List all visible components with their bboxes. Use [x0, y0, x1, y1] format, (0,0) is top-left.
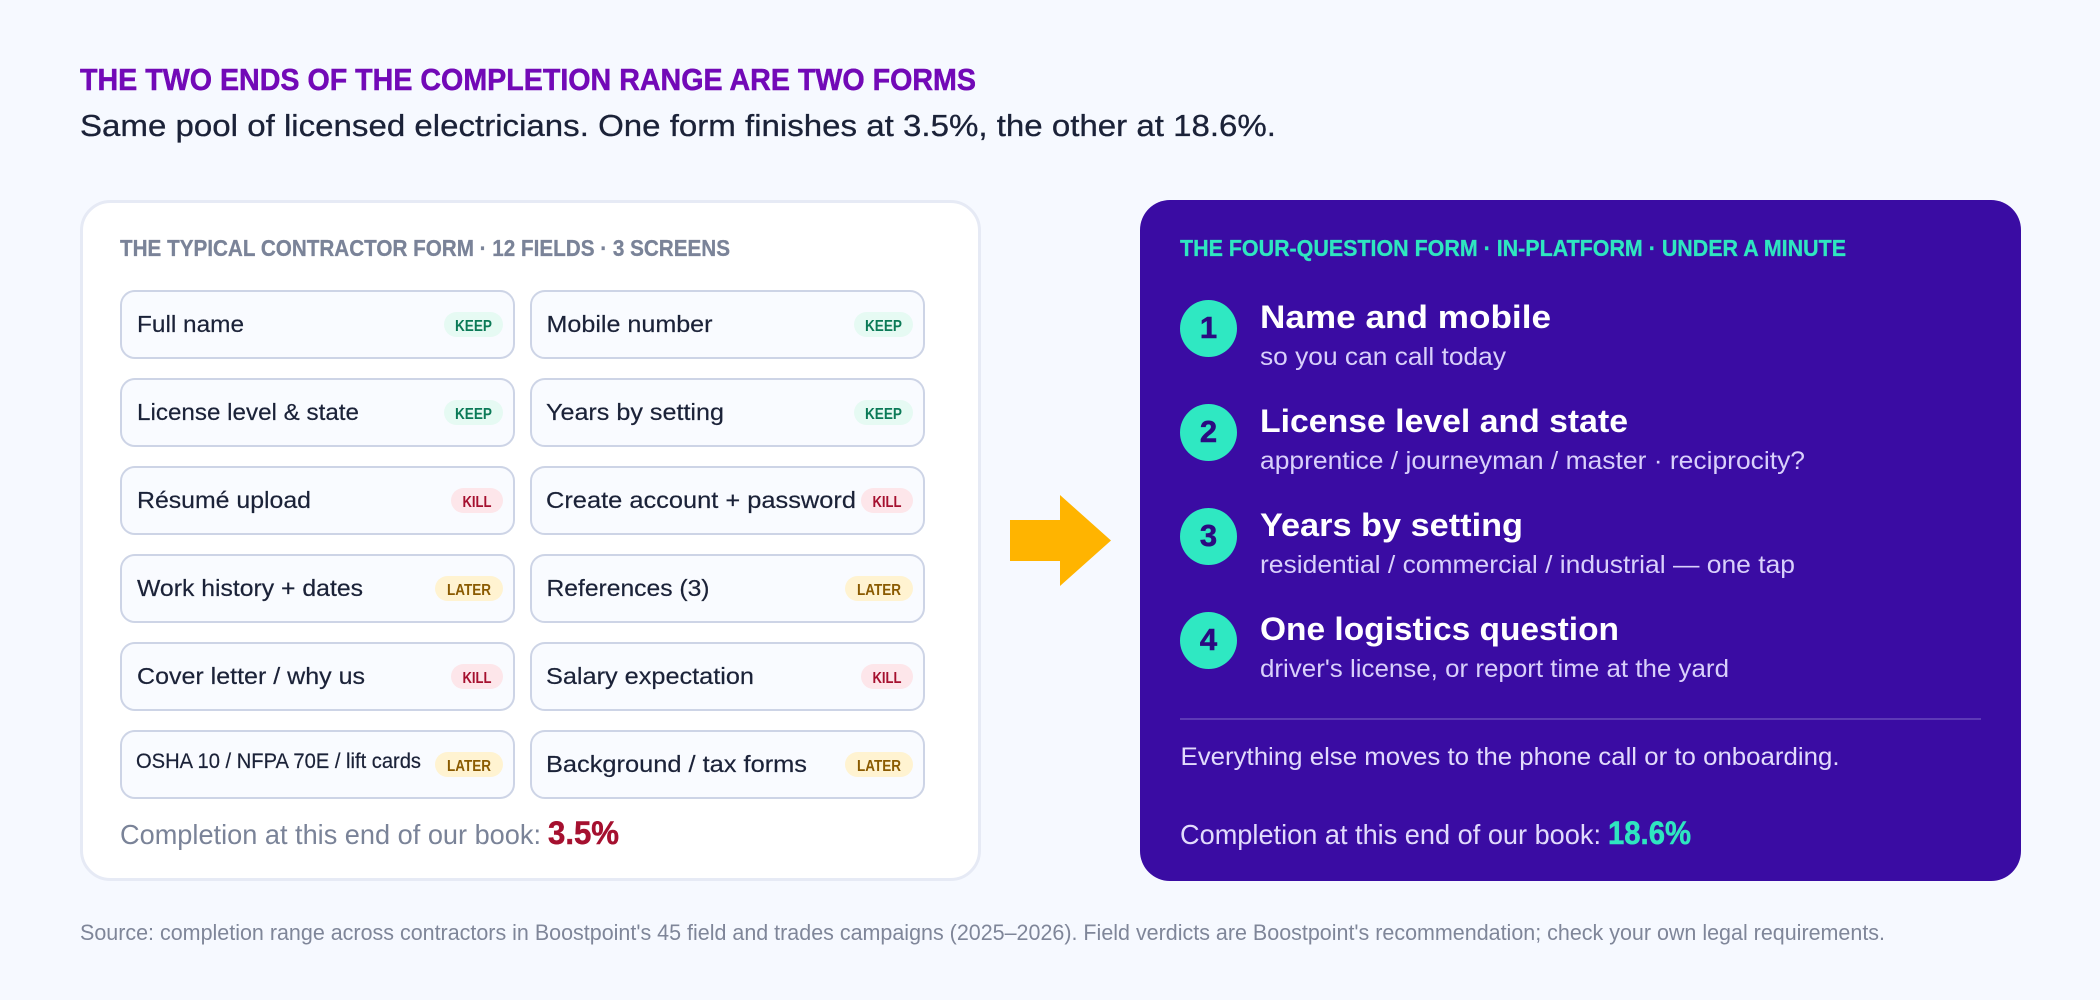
- field: Cover letter / why us: KILL: [462, 670, 492, 687]
- field: Mobile number: KEEP: [865, 318, 902, 335]
- field: License level & state: License level & state: [137, 399, 359, 425]
- step 4: driver's license, or report time at the yard: [1260, 655, 1729, 683]
- field: Years by setting: KEEP: [865, 406, 902, 423]
- field: Résumé upload: Résumé upload: [137, 487, 311, 513]
- step 4: [1180, 611, 1729, 683]
- field: Work history + dates: Work history + dates: [137, 575, 363, 601]
- field: Cover letter / why us: Cover letter / why us: [137, 663, 365, 689]
- field: Résumé upload: [121, 467, 514, 534]
- field: Full name: [121, 291, 514, 358]
- field: Salary expectation: Salary expectation: [546, 663, 754, 689]
- subtitle: Same pool of licensed electricians. One form finishes at 3.5%, the other at 18.6%.: [80, 108, 1276, 143]
- step 2: apprentice / journeyman / master · reciprocity?: [1260, 447, 1805, 475]
- field: Salary expectation: [531, 643, 924, 710]
- step 3: Years by setting: [1260, 507, 1523, 543]
- panel background: [1140, 200, 2021, 881]
- field: Background / tax forms: Background / tax forms: [546, 751, 807, 777]
- panel: typical contractor form: [82, 202, 980, 880]
- field: References (3): LATER: [857, 582, 901, 599]
- title: THE TWO ENDS OF THE COMPLETION RANGE ARE TWO FORMS: [80, 62, 976, 97]
- step 1: [1180, 299, 1551, 371]
- field: Mobile number: Mobile number: [546, 311, 713, 337]
- panel heading: THE TYPICAL CONTRACTOR FORM · 12 FIELDS · 3 SCREENS: [120, 235, 730, 261]
- field: Create account + password: KILL: [872, 494, 902, 511]
- panel background: [82, 202, 980, 880]
- field: Work history + dates: LATER: [447, 582, 491, 599]
- field: License level & state: [121, 379, 514, 446]
- field: Salary expectation: KILL: [872, 670, 902, 687]
- source note: Source: completion range across contractors in Boostpoint's 45 field and trades campaigns (2025–2026). Field verdicts are Boostpoint's recommendation; check your own legal requirements.: [80, 920, 1885, 945]
- panel: four-question form: [1140, 200, 2021, 881]
- field: Mobile number: [531, 291, 924, 358]
- step 1: 1: [1200, 310, 1217, 345]
- step 3: [1180, 507, 1795, 579]
- step 2: [1180, 403, 1805, 475]
- field: Full name: Full name: [137, 311, 244, 337]
- field: Full name: KEEP: [455, 318, 492, 335]
- field: Résumé upload: KILL: [462, 494, 492, 511]
- field: OSHA 10 / NFPA 70E / lift cards: OSHA 10 / NFPA 70E / lift cards: [136, 750, 421, 773]
- field: OSHA 10 / NFPA 70E / lift cards: [121, 731, 514, 798]
- completion stat: 18.6%: Completion at this end of our book:: [1180, 819, 1601, 850]
- step 4: 4: [1200, 622, 1218, 657]
- closing note: Everything else moves to the phone call or to onboarding.: [1180, 743, 1840, 771]
- completion stat: 18.6%: 18.6%: [1608, 815, 1691, 851]
- arrow: [1010, 495, 1111, 586]
- field: Background / tax forms: LATER: [857, 758, 901, 775]
- field: License level & state: KEEP: [455, 406, 492, 423]
- field: Create account + password: Create account + password: [546, 487, 856, 513]
- field: Create account + password: [531, 467, 924, 534]
- step 2: License level and state: [1260, 403, 1628, 439]
- step 2: 2: [1200, 414, 1217, 449]
- field: Years by setting: Years by setting: [546, 399, 724, 425]
- field: Work history + dates: [121, 555, 514, 622]
- step 3: residential / commercial / industrial — one tap: [1260, 551, 1795, 579]
- field: Cover letter / why us: [121, 643, 514, 710]
- completion stat: 3.5%: Completion at this end of our book:: [120, 819, 541, 850]
- step 1: Name and mobile: [1260, 299, 1551, 335]
- field: Background / tax forms: [531, 731, 924, 798]
- panel heading: THE FOUR-QUESTION FORM · IN-PLATFORM · UNDER A MINUTE: [1180, 235, 1846, 261]
- step 4: One logistics question: [1260, 611, 1619, 647]
- field: OSHA 10 / NFPA 70E / lift cards: LATER: [447, 758, 491, 775]
- step 1: so you can call today: [1260, 343, 1507, 371]
- step 3: 3: [1200, 518, 1217, 553]
- completion stat: 3.5%: 3.5%: [548, 815, 619, 851]
- field: References (3): [531, 555, 924, 622]
- field: Years by setting: [531, 379, 924, 446]
- field: References (3): References (3): [546, 575, 710, 601]
